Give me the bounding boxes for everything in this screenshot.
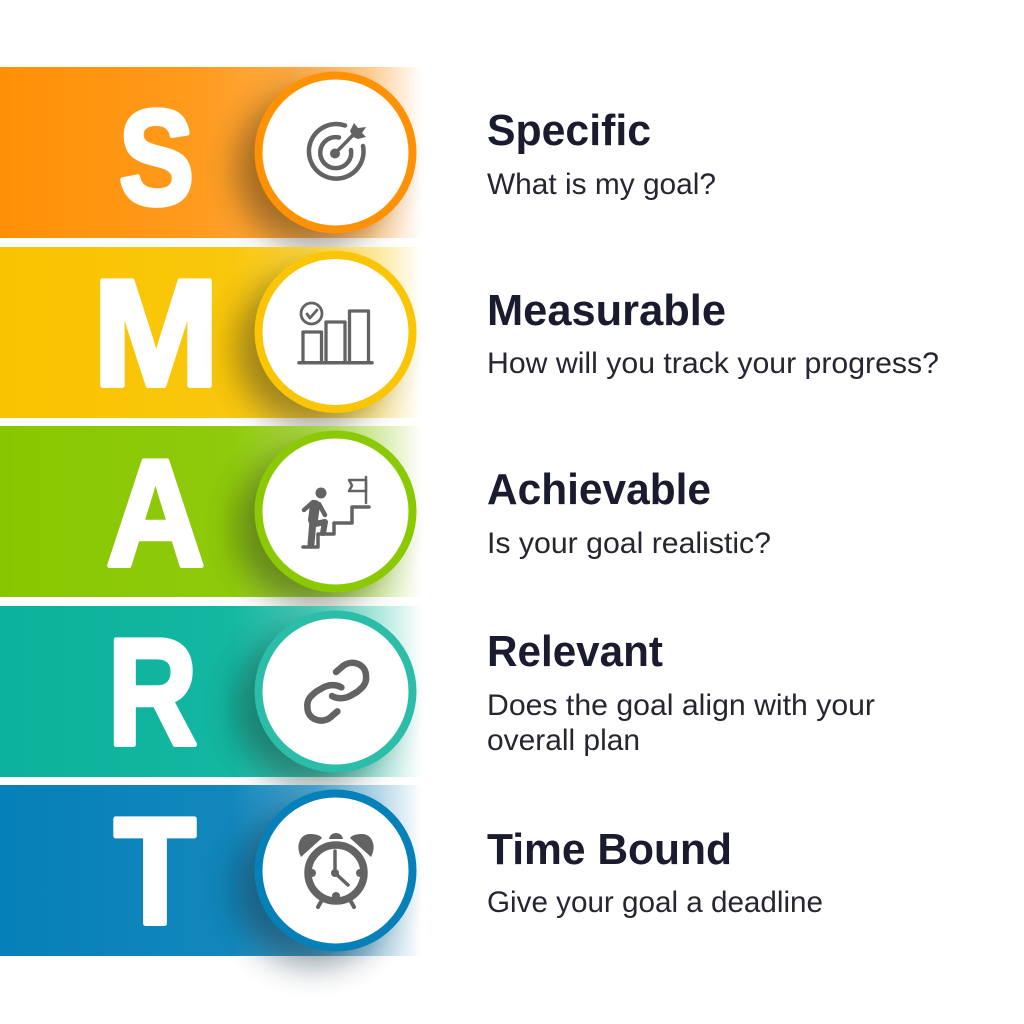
text block: Specific bbox=[487, 106, 716, 201]
panel: R row bbox=[0, 606, 422, 786]
circle: R bbox=[258, 614, 412, 768]
text block: Measurable bbox=[487, 286, 939, 380]
letter S: S bbox=[119, 82, 194, 233]
heading: Time Bound: Time Bound bbox=[487, 825, 732, 874]
band: M bbox=[0, 247, 422, 418]
circle shadow: M bbox=[236, 271, 392, 427]
circle shadow: R bbox=[236, 630, 392, 786]
icon: alarm clock bbox=[298, 833, 374, 907]
icon: target with arrow bbox=[309, 123, 366, 179]
circle shadow: T bbox=[236, 809, 392, 965]
band: R bbox=[0, 606, 422, 777]
panel: M row bbox=[0, 247, 422, 427]
description: Measurable: How will you track your progress? bbox=[487, 347, 939, 380]
circle: T bbox=[258, 794, 412, 948]
description line 2: Relevant: overall plan bbox=[487, 724, 640, 757]
band: T bbox=[0, 785, 422, 956]
letter M: M bbox=[92, 248, 220, 418]
band: A bbox=[0, 426, 422, 597]
description: Relevant: Does the goal align with your bbox=[487, 689, 875, 722]
heading: Achievable: Achievable bbox=[487, 465, 711, 514]
icon: person climbing stairs to flag bbox=[303, 477, 369, 547]
letter A: A bbox=[106, 428, 205, 598]
icon: chain link bbox=[307, 663, 366, 721]
text block: Relevant bbox=[487, 627, 875, 757]
panel: S row bbox=[0, 67, 422, 247]
panel: A row bbox=[0, 426, 422, 606]
letter R: R bbox=[108, 608, 198, 778]
circle shadow: A bbox=[236, 450, 392, 606]
circle: M bbox=[258, 255, 412, 409]
text block: Time Bound bbox=[487, 825, 823, 919]
description: Specific: What is my goal? bbox=[487, 168, 716, 201]
heading: Measurable: Measurable bbox=[487, 286, 726, 335]
band: S bbox=[0, 67, 422, 238]
letter T: T bbox=[114, 786, 196, 956]
icon: bar chart with check bbox=[299, 303, 372, 363]
heading: Specific: Specific bbox=[487, 106, 651, 155]
panel: T row bbox=[0, 785, 422, 965]
heading: Relevant: Relevant bbox=[487, 627, 663, 676]
circle: A bbox=[258, 434, 412, 588]
description: Time Bound: Give your goal a deadline bbox=[487, 886, 823, 919]
circle: S bbox=[258, 76, 412, 230]
description: Achievable: Is your goal realistic? bbox=[487, 527, 771, 560]
text block: Achievable bbox=[487, 465, 771, 560]
circle shadow: S bbox=[236, 91, 392, 247]
